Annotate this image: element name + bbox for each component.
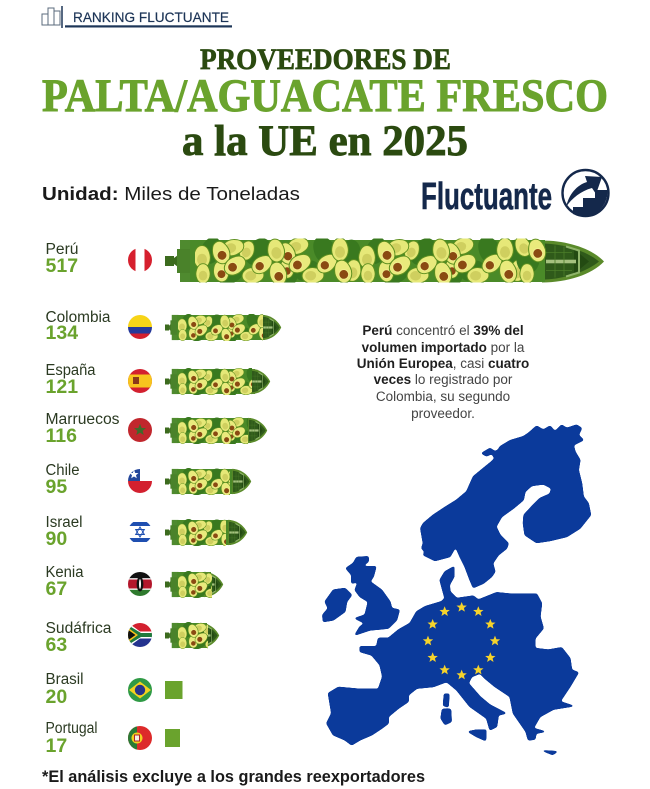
row: Colombia: Colombia: [46, 309, 111, 326]
callout text: Unión Europea, casi cuatro: [357, 356, 529, 371]
ship: Chile: [165, 468, 252, 495]
row: Kenia: Kenia: [46, 564, 84, 581]
row: Perú: Perú: [46, 241, 78, 258]
row: Brasil: 20: [46, 686, 67, 708]
callout text: veces lo registrado por: [374, 372, 512, 387]
flag: Brasil: [128, 678, 152, 702]
ship: Kenia: [165, 571, 224, 598]
ship: Colombia: [165, 314, 282, 341]
flag: Portugal: [128, 726, 152, 750]
row: Brasil: Brasil: [46, 671, 84, 688]
tag label: RANKING FLUCTUANTE: [73, 9, 229, 25]
row: Portugal: [46, 722, 180, 752]
row: Chile: 95: [46, 476, 67, 498]
section tag: Ranking Fluctuante: [42, 6, 232, 28]
footnote: *El análisis excluye a los grandes reexportadores: [42, 768, 425, 786]
logo: Fluctuante: Fluctuante: [421, 176, 552, 218]
unit label: Unidad: Miles de Toneladas: [42, 183, 300, 204]
ship: España: [165, 368, 270, 395]
row: España: [46, 364, 270, 395]
row: Colombia: [46, 310, 282, 341]
callout text: volumen importado por la: [362, 340, 524, 355]
row: Chile: Chile: [46, 462, 80, 479]
row: Perú: 517: [46, 255, 78, 277]
map: Europe with EU stars: [323, 425, 591, 755]
row: España: 121: [46, 376, 78, 398]
flag: Marruecos: [128, 418, 152, 442]
row: Marruecos: Marruecos: [46, 411, 120, 428]
row: Chile: [46, 464, 252, 495]
row: Sudáfrica: [46, 622, 220, 651]
flag: España: [128, 369, 152, 393]
flag: Israel: [130, 522, 150, 542]
flag: Perú: [128, 248, 152, 272]
row: Sudáfrica: 63: [46, 634, 67, 656]
row: Portugal: Portugal: [46, 720, 98, 737]
row: Israel: 90: [46, 528, 67, 550]
flag: Chile: [128, 469, 152, 493]
title: a la UE en 2025: [182, 118, 468, 165]
flag: Sudáfrica: [128, 623, 152, 647]
callout text: Colombia, su segundo: [376, 389, 510, 404]
row: Israel: Israel: [46, 514, 82, 531]
title: PROVEEDORES DE: [200, 43, 451, 76]
flag: Kenia: [128, 572, 152, 596]
ship: Israel: [165, 519, 248, 546]
row: España: España: [46, 362, 96, 379]
ship: Perú: [165, 238, 604, 282]
bar: Brasil: [165, 681, 182, 699]
callout text: Perú concentró el 39% del: [362, 323, 524, 338]
title: [42, 43, 608, 165]
ship: Sudáfrica: [165, 622, 220, 649]
ship: Marruecos: [165, 417, 268, 444]
row: Kenia: [46, 566, 224, 598]
icon: podium buildings: [42, 6, 62, 28]
callout text: proveedor.: [411, 406, 475, 421]
row: Portugal: 17: [46, 735, 67, 757]
row: Sudáfrica: Sudáfrica: [46, 620, 112, 637]
EU stars: [423, 602, 500, 679]
icon: circle with stairs and arrow: [562, 170, 608, 216]
flag: Colombia: [128, 315, 152, 339]
row: Israel: [46, 516, 248, 546]
row: Marruecos: [46, 413, 268, 444]
bar: Portugal: [165, 729, 180, 747]
row: Perú: [46, 238, 604, 282]
row: Colombia: 134: [46, 322, 78, 344]
row: Marruecos: 116: [46, 425, 77, 447]
row: Brasil: [46, 672, 182, 703]
row: Kenia: 67: [46, 578, 67, 600]
